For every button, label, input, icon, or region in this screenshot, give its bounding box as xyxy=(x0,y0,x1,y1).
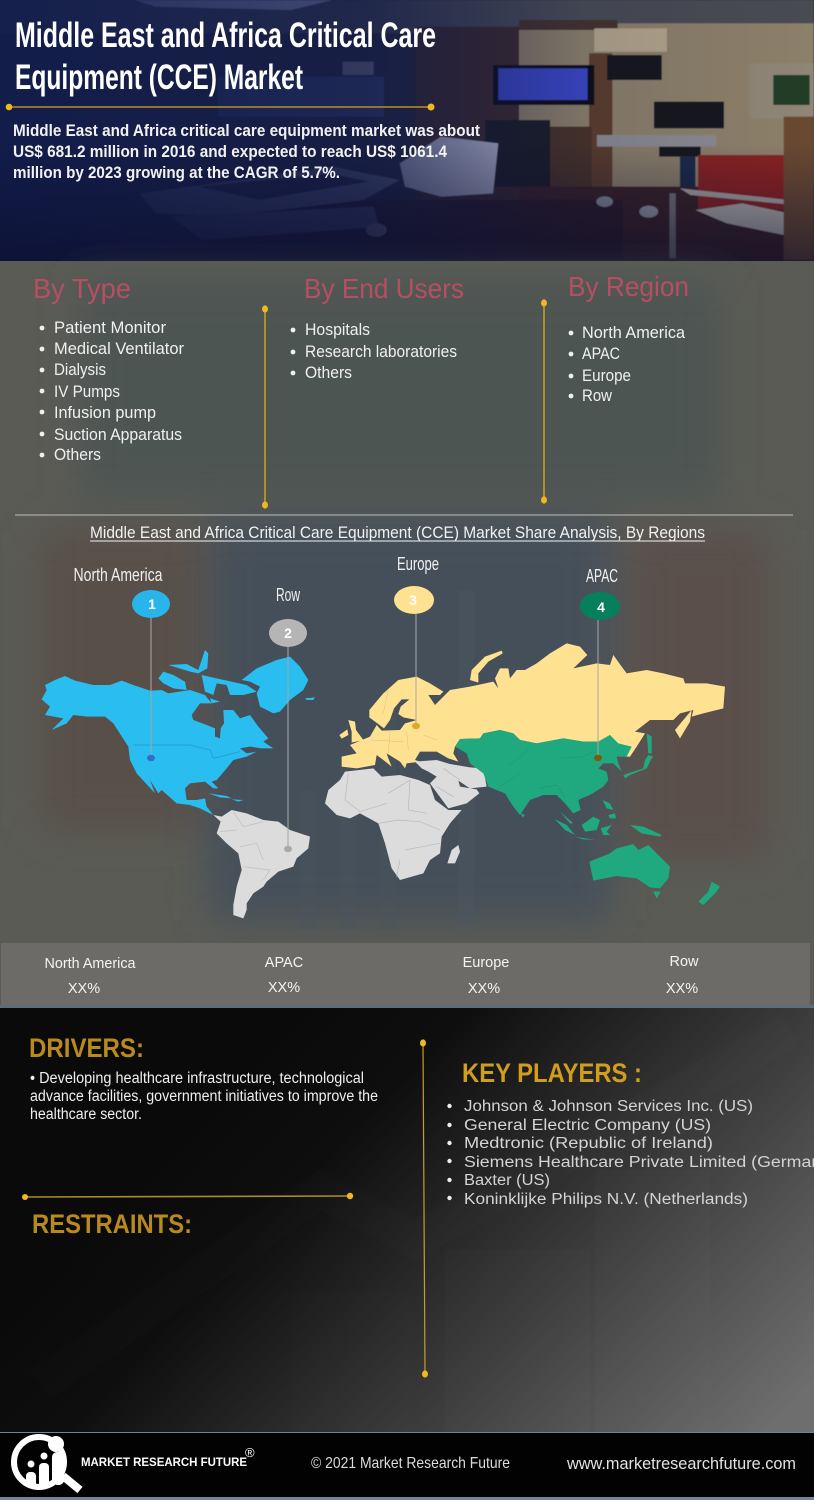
marker: Row: 2 xyxy=(284,625,292,641)
key players section xyxy=(447,1058,814,1208)
drivers section: • Developing healthcare infrastructure, technological xyxy=(30,1070,364,1087)
market share table xyxy=(1,943,810,1005)
panel: by type: Others xyxy=(54,445,101,464)
marker: APAC xyxy=(580,566,620,761)
divider: drivers and restraints xyxy=(22,1193,353,1200)
chart heading: Middle East and Africa Critical Care Equipment (CCE) Market Share Analysis, By Regions xyxy=(90,523,705,542)
panel: by end users: Others xyxy=(305,363,352,382)
map region: Africa and Middle East xyxy=(325,760,487,880)
drivers section xyxy=(29,1033,378,1123)
table column: North America: North America xyxy=(44,956,136,972)
marker: Europe xyxy=(394,554,439,729)
title: Equipment (CCE) Market xyxy=(15,58,303,97)
marker: North America: North America xyxy=(74,565,163,585)
restraints heading: RESTRAINTS: xyxy=(32,1209,192,1239)
title divider line xyxy=(6,104,434,110)
panel: by region: North America xyxy=(582,323,686,342)
key players section: Koninklijke Philips N.V. (Netherlands) xyxy=(464,1191,748,1208)
panel: by type: Patient Monitor xyxy=(54,318,166,337)
key players section: Siemens Healthcare Private Limited (Germany) xyxy=(464,1154,814,1171)
footer brand name: ® xyxy=(245,1445,255,1460)
panel: by end users: By End Users xyxy=(304,273,464,304)
marker: Row xyxy=(269,585,307,852)
panel: by region: Row xyxy=(582,386,613,405)
panel: by type: Medical Ventilator xyxy=(54,339,184,358)
map region: South America xyxy=(213,810,310,918)
panel: by end users: Research laboratories xyxy=(305,342,457,361)
table column: Row xyxy=(666,954,699,997)
panel: by type: Suction Apparatus xyxy=(54,425,182,444)
key players section: Baxter (US) xyxy=(464,1172,550,1189)
panel: by region: Europe xyxy=(582,366,631,385)
table column: North America: XX% xyxy=(68,981,100,997)
marker: Europe: 3 xyxy=(409,592,417,608)
marker: APAC: 4 xyxy=(597,599,605,615)
intro text block: million by 2023 growing at the CAGR of 5.7%. xyxy=(13,164,340,182)
panel: by end users: Hospitals xyxy=(305,320,370,339)
panel: by region: By Region xyxy=(568,271,689,302)
title xyxy=(15,16,436,97)
drivers section: advance facilities, government initiatives to improve the xyxy=(30,1088,378,1105)
panel: by type xyxy=(33,273,184,464)
marker: North America: 1 xyxy=(148,596,156,612)
intro text block: US$ 681.2 million in 2016 and expected to reach US$ 1061.4 xyxy=(13,143,448,161)
key players section: Johnson & Johnson Services Inc. (US) xyxy=(464,1098,753,1115)
panel: drivers, restraints and key players background xyxy=(0,1005,814,1433)
key players section: Medtronic (Republic of Ireland) xyxy=(464,1135,713,1152)
table column: APAC: XX% xyxy=(268,980,300,996)
map region: Europe and Russia xyxy=(339,643,725,768)
panel: by type: IV Pumps xyxy=(54,382,120,401)
table column: APAC xyxy=(265,955,303,996)
intro text block xyxy=(13,122,480,182)
drivers section: healthcare sector. xyxy=(30,1106,142,1123)
key players section: General Electric Company (US) xyxy=(464,1117,711,1134)
map region: Asia Pacific xyxy=(455,730,720,905)
intro text block: Middle East and Africa critical care equipment market was about xyxy=(13,122,480,140)
marker: Europe: Europe xyxy=(397,554,439,574)
icon: market research future logo xyxy=(14,1436,80,1490)
divider: type and end users xyxy=(262,305,268,509)
divider: end users and region xyxy=(541,299,547,504)
table column: Europe xyxy=(463,955,509,997)
divider: left column and key players xyxy=(420,1039,428,1378)
footer bar xyxy=(0,1432,814,1500)
panel: by type: Infusion pump xyxy=(54,403,156,422)
panel: by type: By Type xyxy=(33,273,131,304)
panel: by region xyxy=(568,271,689,405)
table column: Europe: Europe xyxy=(463,955,509,971)
marker: Row: Row xyxy=(276,585,301,605)
table column: Row: Row xyxy=(669,954,699,970)
table column: APAC: APAC xyxy=(265,955,303,971)
table column: Row: XX% xyxy=(666,981,698,997)
footer brand name: MARKET RESEARCH FUTURE xyxy=(81,1455,247,1469)
table column: North America xyxy=(44,956,136,997)
map region: North America xyxy=(42,650,315,815)
panel: market segments and share background xyxy=(0,261,814,1006)
table column: Europe: XX% xyxy=(468,981,500,997)
title: Middle East and Africa Critical Care xyxy=(15,16,436,55)
marker: North America xyxy=(74,565,170,761)
panel: by region: APAC xyxy=(582,344,620,363)
footer brand name xyxy=(81,1445,255,1469)
marker: APAC: APAC xyxy=(586,566,618,586)
footer copyright: © 2021 Market Research Future xyxy=(311,1455,510,1472)
panel: hero hospital room photo xyxy=(0,0,814,261)
key players section: KEY PLAYERS : xyxy=(462,1058,642,1088)
panel: by end users xyxy=(291,273,464,382)
footer website: www.marketresearchfuture.com xyxy=(566,1454,796,1473)
panel: by type: Dialysis xyxy=(54,360,106,379)
world map chart xyxy=(42,643,725,918)
drivers section: DRIVERS: xyxy=(29,1033,144,1063)
